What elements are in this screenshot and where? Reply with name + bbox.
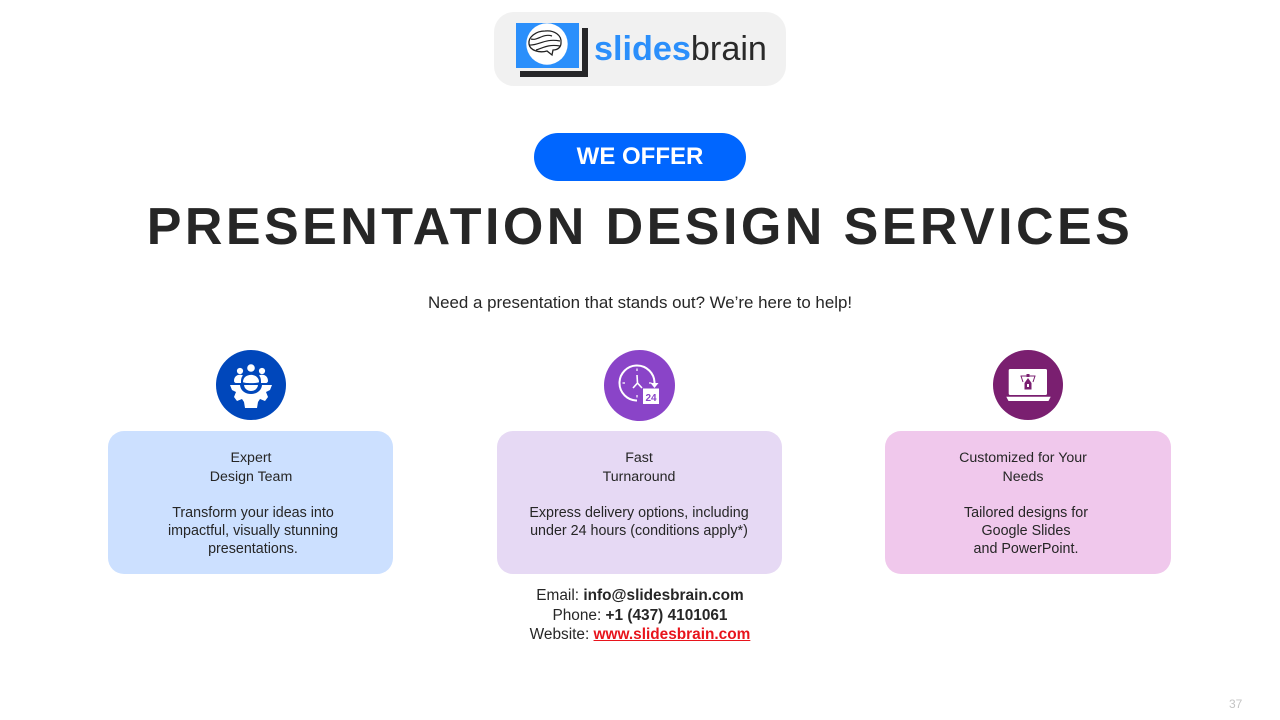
badge: we offer: WE OFFER: [577, 143, 703, 170]
card text: expert design team: Transform your ideas into: [172, 505, 334, 521]
card text: customized: Tailored designs for: [964, 505, 1088, 521]
icon: 24 hour clock: 24: [645, 393, 657, 404]
contact details: Email: info@slidesbrain.com: [536, 587, 744, 604]
icon: team gear: [216, 350, 286, 420]
card heading: expert design team: Expert: [230, 450, 272, 466]
card text: customized: Google Slides: [981, 523, 1071, 539]
icon: laptop design: [993, 350, 1063, 420]
contact details: Phone: +1 (437) 4101061: [552, 606, 728, 624]
logo wordmark: slidesbrain: [594, 30, 767, 68]
card text: expert design team: presentations.: [208, 541, 298, 557]
card heading: customized: Needs: [1002, 469, 1044, 485]
card text: expert design team: impactful, visually stunning: [168, 523, 338, 539]
logo badge: [494, 12, 786, 86]
icon: 24 hour clock: [604, 350, 675, 421]
card heading: customized: [959, 450, 1087, 485]
card text: fast turnaround: under 24 hours (conditions apply*): [530, 523, 748, 539]
panel: fast turnaround: [497, 431, 782, 574]
card heading: fast turnaround: Fast: [625, 450, 653, 466]
card text: customized: and PowerPoint.: [974, 541, 1078, 557]
page number: 37: [1229, 697, 1242, 711]
contact details: Website: www.slidesbrain.com: [530, 626, 750, 643]
panel: customized for your needs: [885, 431, 1171, 574]
card text: fast turnaround: Express delivery options, including: [529, 505, 749, 521]
card text: customized: [964, 505, 1088, 557]
card text: fast turnaround: [529, 505, 749, 539]
subtitle: Need a presentation that stands out? We’re here to help!: [428, 293, 852, 312]
title: PRESENTATION DESIGN SERVICES: [147, 198, 1133, 256]
badge: we offer: [534, 133, 746, 181]
card heading: fast turnaround: Turnaround: [603, 469, 675, 485]
logo icon: [516, 23, 588, 77]
card heading: expert design team: [210, 450, 292, 485]
card heading: fast turnaround: [602, 450, 675, 485]
panel: expert design team: [108, 431, 393, 574]
card heading: customized: Customized for Your: [959, 450, 1087, 466]
card text: expert design team: [168, 505, 338, 557]
card heading: expert design team: Design Team: [210, 469, 292, 485]
contact details: [530, 587, 750, 643]
